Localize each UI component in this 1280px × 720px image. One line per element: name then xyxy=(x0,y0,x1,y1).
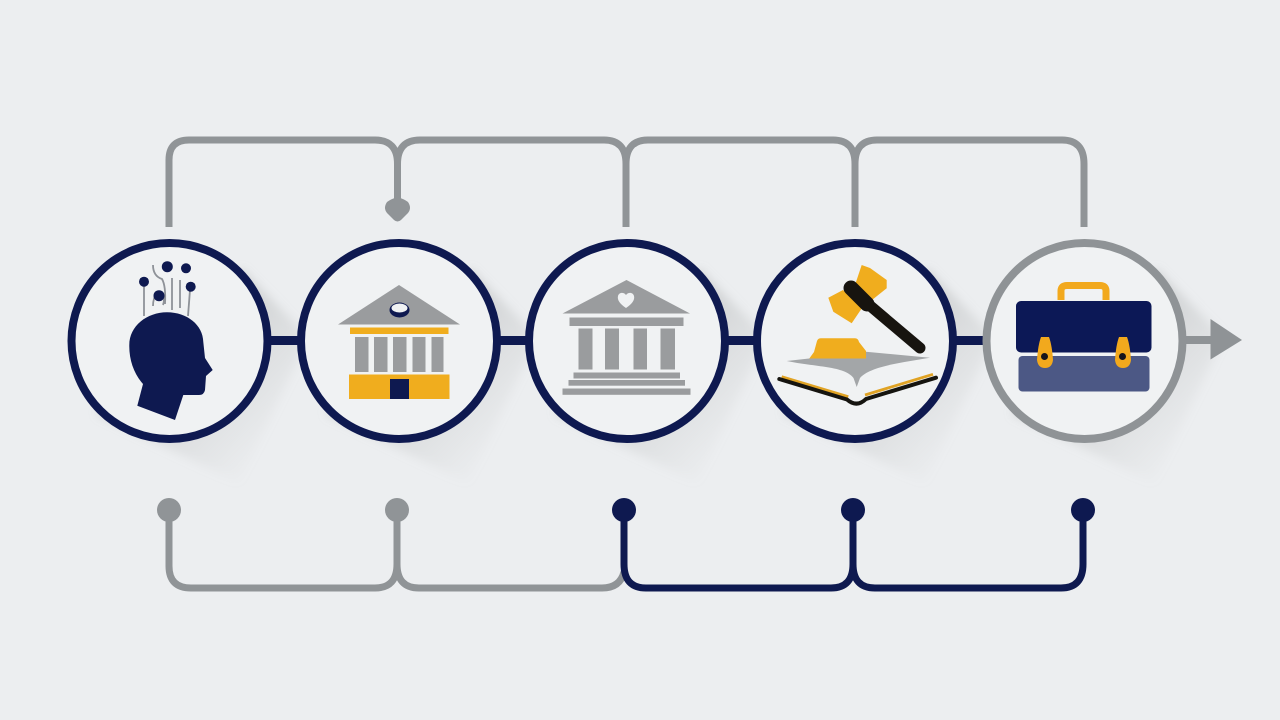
stage 1: mind xyxy=(72,243,268,439)
icon: briefcase xyxy=(1016,286,1152,392)
stage 4: law xyxy=(757,243,953,439)
connector end dots xyxy=(157,498,1095,522)
stage 5: career xyxy=(986,243,1182,439)
icon: gavel and open book xyxy=(779,265,936,404)
icon: grey columned building xyxy=(562,280,690,395)
icon: connector pin xyxy=(385,197,410,222)
top connector lines xyxy=(169,140,1084,227)
icon: yellow and grey building xyxy=(338,285,460,399)
stage 2: institution xyxy=(301,243,497,439)
bottom connector lines: navy xyxy=(624,510,1083,588)
link bars between stages xyxy=(268,336,986,345)
stage 3: grey institution xyxy=(529,243,725,439)
bottom connector lines: grey xyxy=(169,510,624,588)
arrow: output xyxy=(1184,319,1242,360)
icon: head with neural nodes xyxy=(129,261,213,420)
circle shadows xyxy=(97,269,1224,483)
